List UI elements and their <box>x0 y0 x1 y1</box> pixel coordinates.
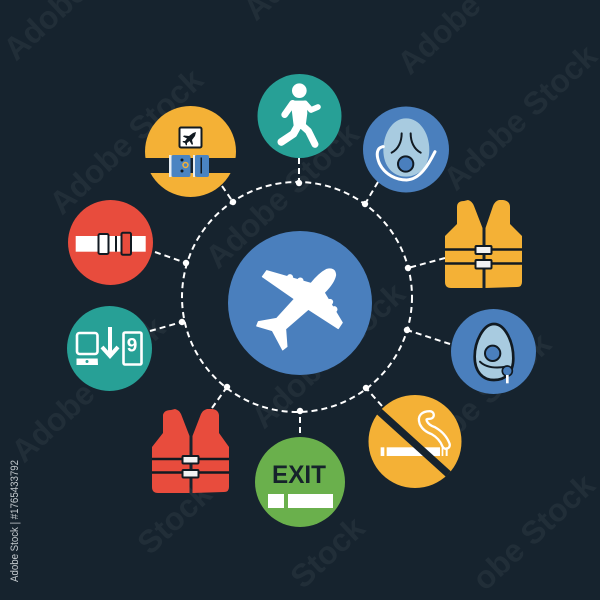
vertical stock credit: Adobe Stock | #1765433792 <box>9 460 21 582</box>
icon: seat belt <box>68 200 153 285</box>
belt buckles <box>169 155 209 177</box>
icon: no smoking <box>368 395 462 488</box>
dashed ring with connectors <box>150 158 450 433</box>
icon: airplane <box>257 269 342 350</box>
infographic canvas: Adobe Stock <box>4 309 172 469</box>
infographic canvas: Adobe Stock <box>244 275 412 435</box>
infographic canvas: obe Stock <box>465 466 600 597</box>
infographic canvas: Stock <box>130 475 219 561</box>
icon: yellow life vest <box>445 200 522 288</box>
infographic canvas: Adobe Stock <box>390 325 558 485</box>
central airplane badge <box>228 231 372 375</box>
infographic canvas: Adobe Stock <box>436 37 600 197</box>
icon: exit sign: EXIT <box>272 461 326 489</box>
infographic canvas: Adobe Stock <box>42 61 210 221</box>
infographic canvas: Stock <box>283 509 372 595</box>
icon: monitor, arrow and phone <box>67 306 152 391</box>
infographic canvas: Adobe Stock <box>198 115 366 275</box>
plane sign <box>180 128 202 148</box>
icon: monitor, arrow and phone: 9 <box>127 336 137 356</box>
icon: yawning face with mask <box>363 106 449 192</box>
ring nodes <box>179 180 411 414</box>
icon: seatbelt and aircraft panel <box>140 106 242 197</box>
icon: walking person <box>258 74 342 158</box>
icon: oxygen mask <box>451 309 536 394</box>
icon: exit sign <box>255 437 345 527</box>
icon: red life vest <box>152 409 229 493</box>
